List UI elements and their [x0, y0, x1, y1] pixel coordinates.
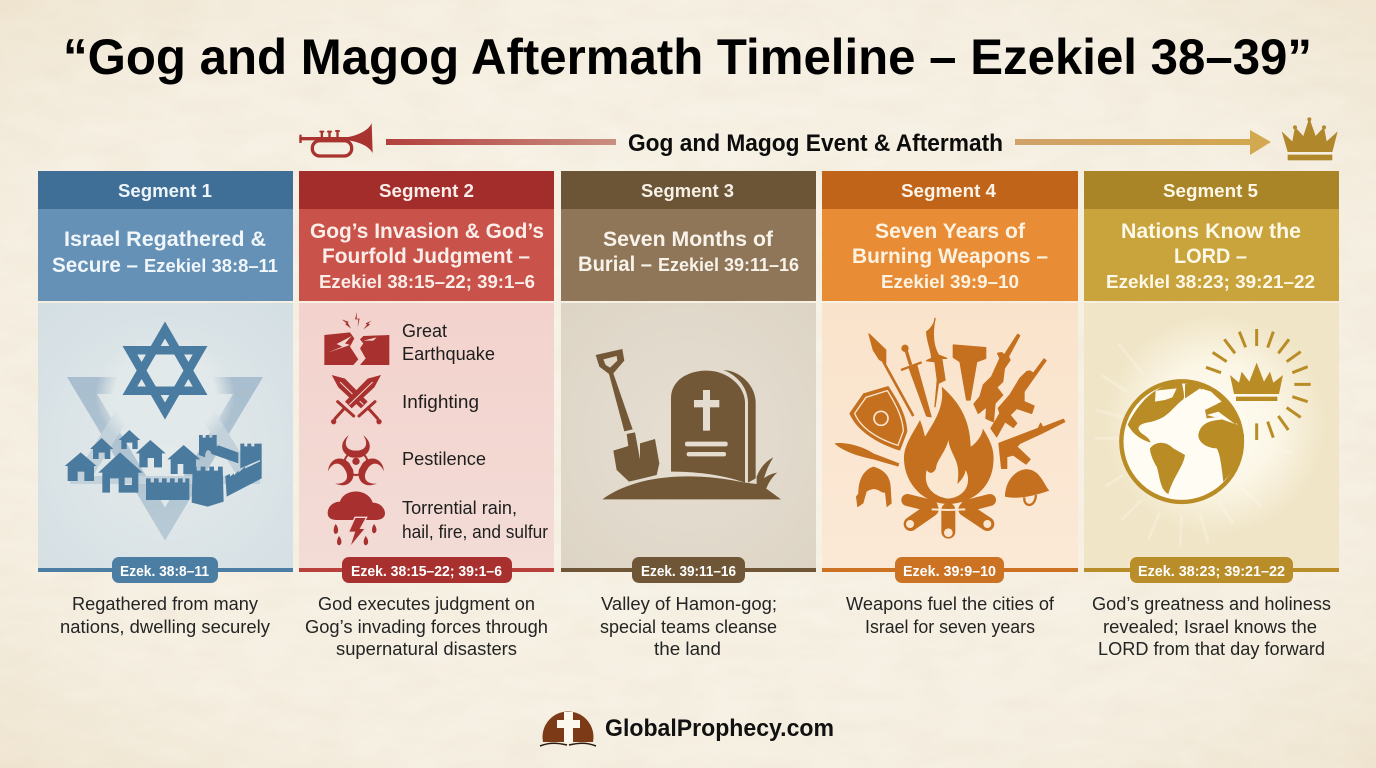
segment 5 title: LORD – — [1174, 245, 1247, 268]
blade — [834, 443, 899, 467]
town — [65, 430, 262, 507]
divider and reference badge — [1084, 557, 1339, 583]
segment 1 header: Segment 1 — [118, 181, 212, 201]
segment 2 image panel — [299, 303, 554, 570]
segment 3 image panel — [561, 303, 816, 570]
segment 5 header — [1084, 171, 1339, 209]
divider and reference badge — [822, 557, 1078, 583]
flame — [902, 383, 996, 506]
divider and reference badge: Ezek. 38:23; 39:21–22 — [1138, 563, 1285, 580]
segment 1 description — [60, 594, 270, 637]
panel: segment 4 — [822, 171, 1078, 637]
segment 1 title: Ezekiel 38:8–11 — [144, 256, 278, 276]
timeline arrow banner — [299, 117, 1338, 160]
segment 3 header: Segment 3 — [641, 181, 734, 201]
glow behind dark star — [95, 335, 235, 455]
segment 4 title: Seven Years of — [875, 220, 1026, 243]
segment 2 description: Gog’s invading forces through — [305, 617, 548, 637]
arrow line: left segment — [386, 139, 616, 145]
divider and reference badge: Ezek. 39:9–10 — [903, 563, 996, 580]
panel: segment 2 — [299, 171, 554, 659]
divider and reference badge: Ezek. 39:11–16 — [641, 563, 736, 580]
segment 2 title: Ezekiel 38:15–22; 39:1–6 — [319, 272, 535, 292]
divider and reference badge: Ezek. 38:8–11 — [120, 563, 209, 580]
weapons — [869, 318, 1065, 468]
icon: crown — [1282, 117, 1338, 160]
segment 4 title: Ezekiel 39:9–10 — [881, 272, 1019, 292]
segment 4 header — [822, 171, 1078, 209]
footer logo — [540, 711, 834, 746]
icon: crossed swords — [331, 375, 382, 424]
segment 4 description — [846, 594, 1055, 637]
segment 5 description: revealed; Israel knows the — [1103, 617, 1317, 637]
arrow line: right segment — [1015, 130, 1271, 155]
segment 4 image panel — [822, 303, 1078, 570]
right helmet — [1005, 469, 1049, 498]
divider and reference badge — [38, 557, 293, 583]
website name: GlobalProphecy.com — [605, 715, 834, 742]
icon: biohazard — [325, 435, 387, 489]
left helmet — [856, 467, 892, 507]
pale background star — [70, 386, 260, 524]
segment 5 header: Segment 5 — [1163, 181, 1258, 201]
segment 3 description — [600, 594, 777, 659]
segment 5 description — [1092, 594, 1331, 659]
segment 5 title: Nations Know the — [1121, 220, 1301, 243]
label: great earthquake: Great — [402, 320, 447, 341]
logs — [907, 500, 990, 506]
label: hail fire sulfur: hail, fire, and sulfur — [402, 521, 548, 542]
segment 1 title: Israel Regathered & — [64, 228, 266, 251]
segment 1 image panel — [38, 303, 293, 570]
segment 5 description: God’s greatness and holiness — [1092, 594, 1331, 614]
divider and reference badge: Ezek. 38:15–22; 39:1–6 — [351, 563, 502, 580]
segment 3 description: the land — [654, 639, 721, 659]
panel: segment 5 — [1084, 171, 1339, 659]
divider and reference badge — [561, 557, 816, 583]
segment 1 description: Regathered from many — [72, 594, 258, 614]
segment 4 description: Weapons fuel the cities of — [846, 594, 1055, 614]
segment 1 description: nations, dwelling securely — [60, 617, 270, 637]
icon: earthquake — [324, 312, 389, 365]
timeline label: Gog and Magog Event & Aftermath — [628, 130, 1003, 157]
icon: weapons burning on campfire — [834, 318, 1065, 537]
label: great earthquake second line: Earthquake — [402, 343, 495, 364]
segment 3 title: Burial – — [578, 253, 652, 276]
judgment list — [324, 312, 548, 548]
label: pestilence: Pestilence — [402, 448, 486, 469]
icon: cross and open book — [540, 711, 596, 746]
segment 1 title: Secure – — [52, 254, 138, 277]
title: “Gog and Magog Aftermath Timeline – Ezekiel 38–39” — [63, 29, 1312, 85]
segment 5 image panel — [1084, 303, 1339, 570]
icon: star of David over homes and walls — [65, 330, 262, 524]
segment 1 header — [38, 171, 293, 209]
segment 3 title — [561, 209, 816, 301]
segment 5 description: LORD from that day forward — [1098, 639, 1325, 659]
segment 2 header: Segment 2 — [379, 181, 474, 201]
segment 3 title: Ezekiel 39:11–16 — [658, 255, 799, 275]
faint light rays — [1095, 343, 1292, 547]
shield — [849, 386, 907, 451]
icon: shovel and gravestone — [596, 349, 781, 499]
segment 2 title: Gog’s Invasion & God’s — [310, 220, 544, 243]
segment 2 title: Fourfold Judgment – — [322, 245, 530, 268]
label: infighting: Infighting — [402, 391, 479, 412]
panel: segment 1 — [38, 171, 293, 637]
segment 4 title — [822, 209, 1078, 301]
segment 1 title — [38, 209, 293, 301]
segment 4 description: Israel for seven years — [865, 617, 1035, 637]
icon: trumpet — [299, 123, 373, 156]
label: torrential rain: Torrential rain, — [402, 497, 517, 518]
crown — [1230, 363, 1283, 401]
icon: globe with crown and rays — [1095, 329, 1311, 547]
dark star — [130, 330, 200, 411]
segment 2 description — [305, 594, 548, 659]
segment 2 title — [299, 209, 554, 301]
segment 3 description: Valley of Hamon-gog; — [601, 594, 777, 614]
divider and reference badge — [299, 557, 554, 583]
icon: storm cloud — [328, 492, 385, 548]
segment 4 title: Burning Weapons – — [852, 245, 1048, 268]
segment 3 title: Seven Months of — [603, 228, 774, 251]
segment 2 description: God executes judgment on — [318, 594, 535, 614]
segment 4 header: Segment 4 — [901, 181, 996, 201]
segment 5 title: Ezeklel 38:23; 39:21–22 — [1106, 272, 1315, 292]
segment 2 description: supernatural disasters — [336, 639, 517, 659]
segment 3 description: special teams cleanse — [600, 617, 777, 637]
segment 2 header — [299, 171, 554, 209]
rays — [1206, 329, 1311, 440]
globe — [1121, 381, 1244, 502]
segment 3 header — [561, 171, 816, 209]
segment 5 title — [1084, 209, 1339, 301]
panel: segment 3 — [561, 171, 816, 659]
